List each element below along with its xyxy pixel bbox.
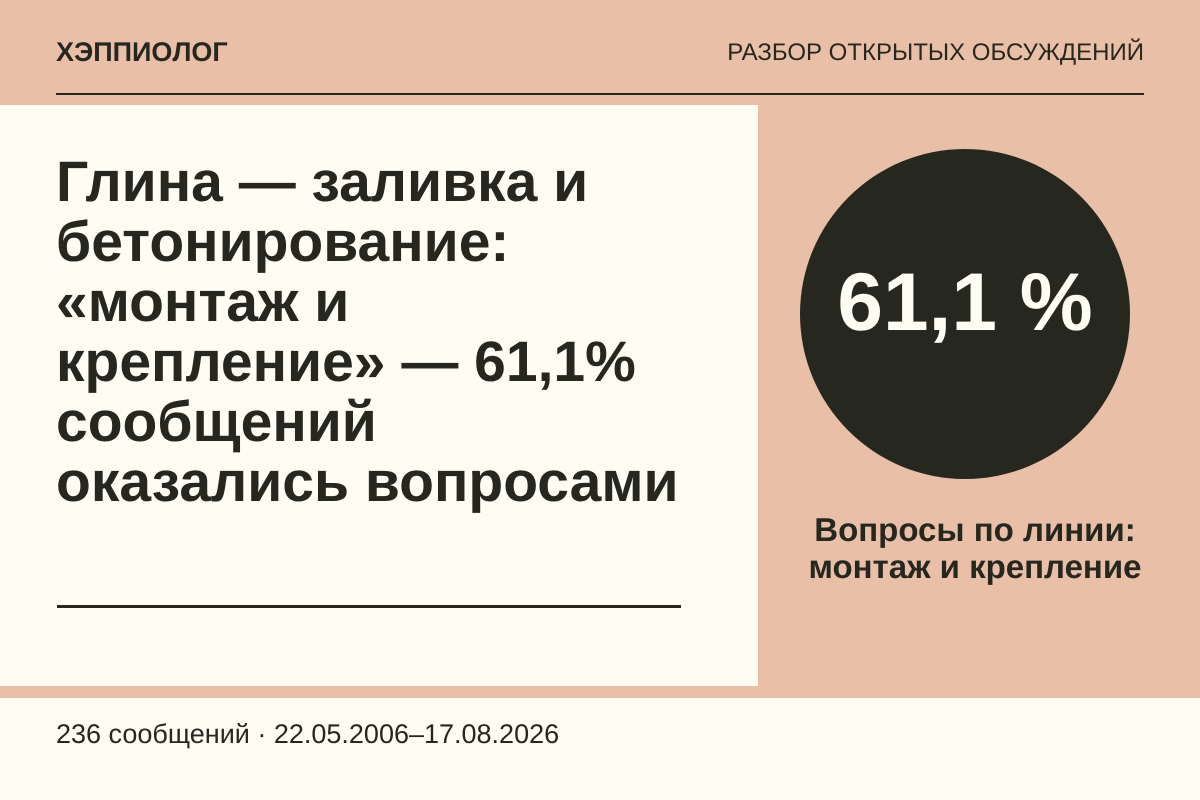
headline text: «монтаж и [56, 270, 349, 334]
headline text: бетонирование: [56, 210, 509, 274]
headline text: Глина — заливка и [56, 150, 588, 214]
headline underline [57, 605, 681, 608]
headline text: крепление» — 61,1% [56, 330, 636, 394]
stat circle: 61,1 % [837, 257, 1093, 348]
stat circle [800, 149, 1130, 479]
headline text: сообщений [56, 390, 377, 454]
footer text: 236 сообщений · 22.05.2006–17.08.2026 [56, 719, 559, 749]
panel: headline [0, 105, 758, 686]
headline text [56, 150, 679, 514]
stat caption [808, 511, 1142, 585]
footer [0, 698, 1200, 800]
stat caption: монтаж и крепление [808, 548, 1142, 585]
header brand: ХЭППИОЛОГ [56, 37, 228, 67]
headline text: оказались вопросами [56, 450, 679, 514]
stat caption: Вопросы по линии: [814, 511, 1136, 548]
header rule [56, 93, 1144, 95]
header caption: РАЗБОР ОТКРЫТЫХ ОБСУЖДЕНИЙ [727, 39, 1144, 66]
